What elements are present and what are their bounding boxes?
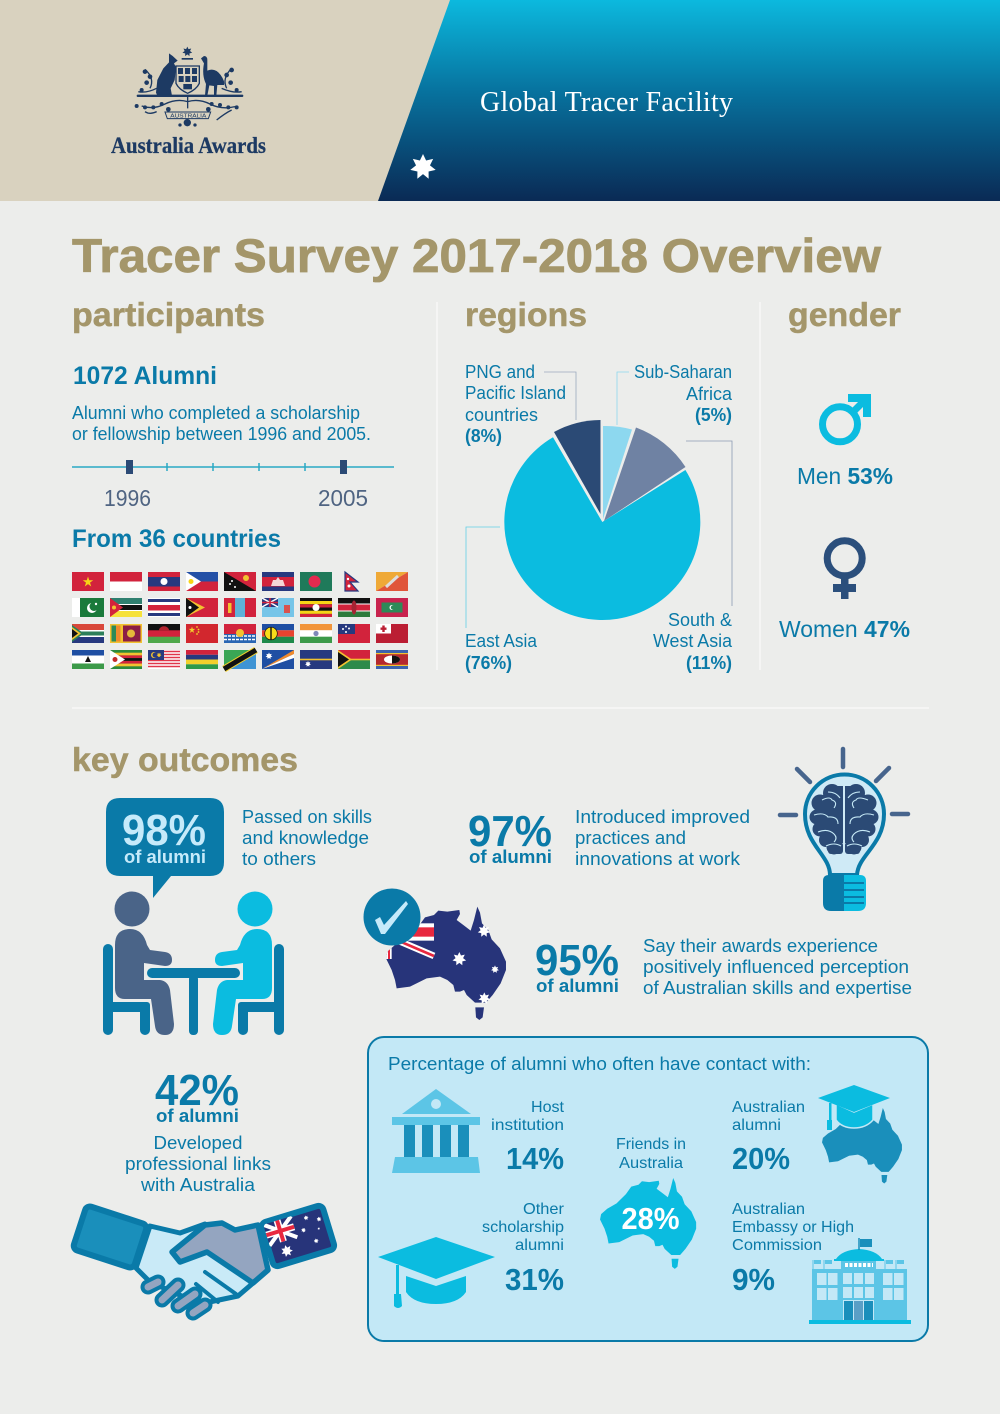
panel: regions [465,296,733,673]
speech bubble: of alumni [124,847,206,867]
Australian embassy [732,1201,854,1297]
label: Sub-Saharan Africa: Africa [686,384,733,404]
heading: key outcomes: key outcomes [72,741,298,778]
facility title: Global Tracer Facility [480,87,733,118]
flag: Eswatini [376,650,408,669]
speech bubble [106,798,224,898]
practices text: Introduced improved [575,807,750,827]
flag: Laos [148,572,180,591]
timeline: 2005 [318,485,368,511]
main title: Tracer Survey 2017-2018 Overview [72,229,881,282]
other scholarship alumni: Other [523,1201,565,1218]
outcome: 98 percent passed on skills [103,798,372,1035]
flag: Pakistan [72,598,104,617]
icon: Australia map flag with check [364,888,506,1020]
of alumni label: of alumni [536,976,619,996]
heading: regions: regions [465,296,587,333]
Australian alumni: alumni [732,1117,781,1134]
flag: Mongolia [224,598,256,617]
stat 42 percent: 42% [155,1066,239,1115]
flag: Samoa [338,624,370,643]
icon: light bulb with brain [780,749,908,911]
panel: gender [779,296,910,642]
countries heading: From 36 countries [72,525,281,553]
flag: Vanuatu [338,650,370,669]
flags grid [72,572,408,669]
flag: Philippines [186,572,218,591]
host institution [491,1099,565,1176]
stat 95 percent: 95% [535,936,619,985]
panel title: Percentage of alumni who often have contact with: [388,1054,811,1074]
panel: contact percentages [368,1037,928,1341]
perception text: positively influenced perception [643,957,909,977]
alumni description: Alumni who completed a scholarship [72,403,360,423]
flag: Kenya [338,598,370,617]
label: PNG and Pacific: countries [465,405,538,425]
flag: Malaysia [148,650,180,669]
Australian embassy: Commission [732,1237,822,1254]
perception text: Say their awards experience [643,936,878,956]
label: South and West Asia: South & [668,610,732,630]
flag: Marshall Islands [262,650,294,669]
icon: embassy building [809,1238,911,1324]
practices text: innovations at work [575,849,741,869]
flag: Maldives [376,598,408,617]
flag: China [186,624,218,643]
crest logo: AUSTRALIA [170,113,207,119]
flag: Nepal [345,572,358,591]
skills text: Passed on skills [242,807,372,827]
flag: New Caledonia [262,624,294,643]
other scholarship alumni: 31% [505,1262,564,1297]
practices text: practices and [575,828,686,848]
Australian embassy: Australian [732,1201,805,1218]
icon: female symbol [827,541,862,599]
flag: Sri Lanka [110,624,142,643]
icon: two people at table [103,892,284,1035]
flag: Timor-Leste [186,598,218,617]
perception text: of Australian skills and expertise [643,978,912,998]
label: PNG and Pacific: (8%) [465,426,502,446]
flag: Indonesia [110,572,142,591]
Australian alumni: Australian [732,1099,805,1116]
label: South and West Asia: West Asia [653,631,733,651]
friends in Australia: Friends in [616,1136,686,1153]
heading: participants: participants [72,296,265,333]
of alumni label: of alumni [469,847,552,867]
friends in Australia: Australia [619,1155,683,1172]
host institution: 14% [506,1141,564,1176]
outcome: 42 percent professional links [72,1066,335,1313]
other scholarship alumni: alumni [515,1237,564,1254]
Australian alumni: 20% [732,1141,790,1176]
flag: South Africa [72,624,104,643]
label: South and West Asia: (11%) [686,653,732,673]
flag: Cambodia [262,572,294,591]
other scholarship alumni: scholarship [482,1219,564,1236]
skills text: to others [242,849,316,869]
friends in Australia [600,1136,696,1269]
flag: Nauru [300,650,332,669]
other scholarship alumni [482,1201,565,1297]
host institution: Host [531,1099,565,1116]
links text: professional links [125,1154,271,1174]
flag: Mauritius [186,650,218,669]
label: PNG and Pacific: Pacific Island [465,383,566,403]
flag: Tanzania [224,650,256,669]
label: Sub-Saharan Africa: Sub-Saharan [634,362,732,382]
crest logo [135,47,243,127]
Australian embassy: Embassy or High [732,1219,854,1236]
heading: gender: gender [788,296,901,333]
flag: Papua New Guinea [224,572,256,591]
flag: Vietnam [72,572,104,591]
header band [0,0,1000,201]
flag: Mozambique [110,598,142,617]
outcome: 97 percent improved practices [468,749,908,911]
icon: male symbol [822,394,871,442]
of alumni label: of alumni [156,1106,239,1126]
flag: Tonga [376,624,408,643]
links text: with Australia [140,1175,256,1195]
leader lines [466,372,732,628]
skills text: and knowledge [242,828,369,848]
flag: Lesotho [72,650,104,669]
Australian embassy: 9% [732,1262,775,1297]
outcome: 95 percent positive perception [364,888,912,1020]
speech bubble: 98% [122,806,206,855]
links text: Developed [154,1133,242,1153]
label: East Asia: East Asia [465,631,538,651]
pie chart [504,420,700,620]
alumni description: or fellowship between 1996 and 2005. [72,424,371,444]
timeline: 1996 [104,485,151,511]
icon: handshake [72,1205,335,1313]
icon: graduation cap over Australia [818,1085,902,1183]
Australian alumni [732,1099,805,1176]
men percentage: Men 53% [797,463,893,489]
women percentage: Women 47% [779,616,910,642]
flag: Fiji [262,598,294,617]
flag: Zimbabwe [110,650,142,669]
alumni count: 1072 Alumni [73,362,217,390]
label: East Asia: (76%) [465,653,512,673]
flag: India [300,624,332,643]
flag: Bangladesh [300,572,332,591]
flag: Bhutan [376,572,408,591]
icon: commonwealth star [410,154,436,179]
section dividers [72,302,929,708]
host institution: institution [491,1117,564,1134]
logo wordmark: Australia Awards [111,133,266,158]
flag: Malawi [148,624,180,643]
icon: graduation cap [378,1237,495,1308]
icon: institution building [392,1089,480,1173]
panel: participants [72,296,408,669]
label: Sub-Saharan Africa: (5%) [695,405,732,425]
flag: Uganda [300,598,332,617]
timeline [72,460,394,511]
label: PNG and Pacific: PNG and [465,362,535,382]
flag: Costa Rica [148,598,180,617]
friends in Australia: 28% [622,1201,680,1236]
stat 97 percent: 97% [468,807,552,856]
flag: Kiribati [224,624,256,643]
